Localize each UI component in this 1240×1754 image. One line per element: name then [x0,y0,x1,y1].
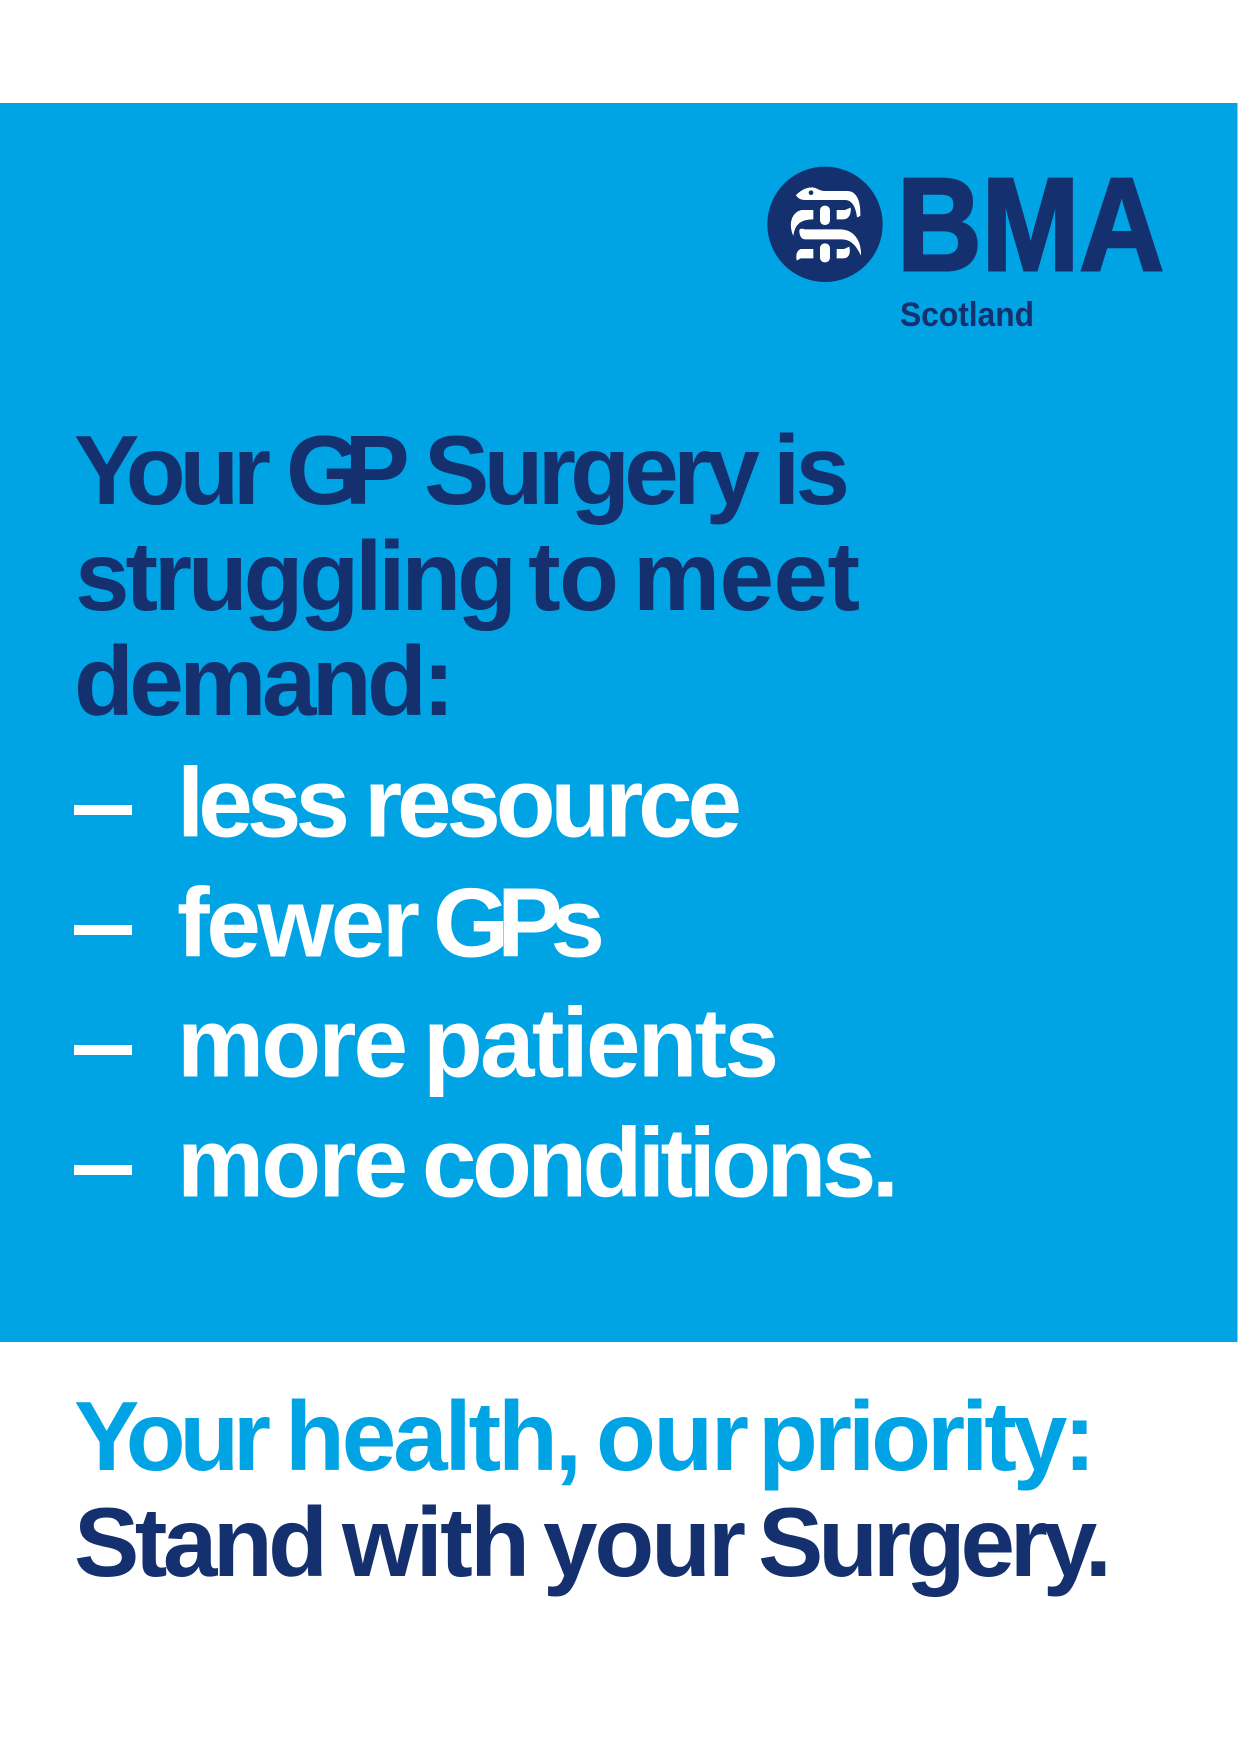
wordmark: BMA: BMA [897,151,1164,298]
heading: struggling to meet demand: meet [633,521,860,631]
list item: less resource: less [177,748,350,858]
heading: struggling to meet demand [74,415,860,736]
list item: fewer GPs [74,868,605,978]
heading: struggling to meet demand: to [528,521,619,631]
heading: struggling to meet demand: GP [286,415,408,525]
list item: fewer GPs: GPs [433,868,605,978]
list item: more patients: patients [423,988,779,1098]
list item: more conditions: conditions. [422,1108,899,1218]
list item: less resource: resource [364,748,742,858]
list item: more conditions: more [177,1108,408,1218]
panel: blue main panel [0,103,1238,1342]
slogan line: light blue: our [596,1381,749,1491]
slogan line: navy: Stand [74,1487,328,1597]
icon: BMA rod and serpent roundel [767,167,883,282]
list item: less resource [74,748,742,858]
list item: fewer GPs: fewer [177,868,420,978]
list item: more patients: more [177,988,408,1098]
list item: more conditions [74,1108,899,1218]
list item: more patients [74,988,779,1098]
heading: struggling to meet demand: is [773,415,850,525]
wordmark: Scotland: Scotland [900,296,1034,334]
heading: struggling to meet demand: Surgery [424,415,760,525]
list: pressures on the surgery [74,748,899,1218]
heading: struggling to meet demand: struggling [75,521,517,631]
slogan: your health, our priority [74,1381,1112,1597]
slogan line: light blue: Your [74,1381,271,1491]
slogan line: light blue: health, [285,1381,582,1491]
heading: struggling to meet demand: Your [74,415,271,525]
heading: struggling to meet demand: demand: [74,626,455,736]
slogan line: light blue: priority: [758,1381,1096,1491]
slogan line: navy: with [341,1487,530,1597]
slogan line: navy: Surgery. [758,1487,1112,1597]
slogan line: navy: your [543,1487,746,1597]
logo: BMA Scotland [767,151,1164,334]
